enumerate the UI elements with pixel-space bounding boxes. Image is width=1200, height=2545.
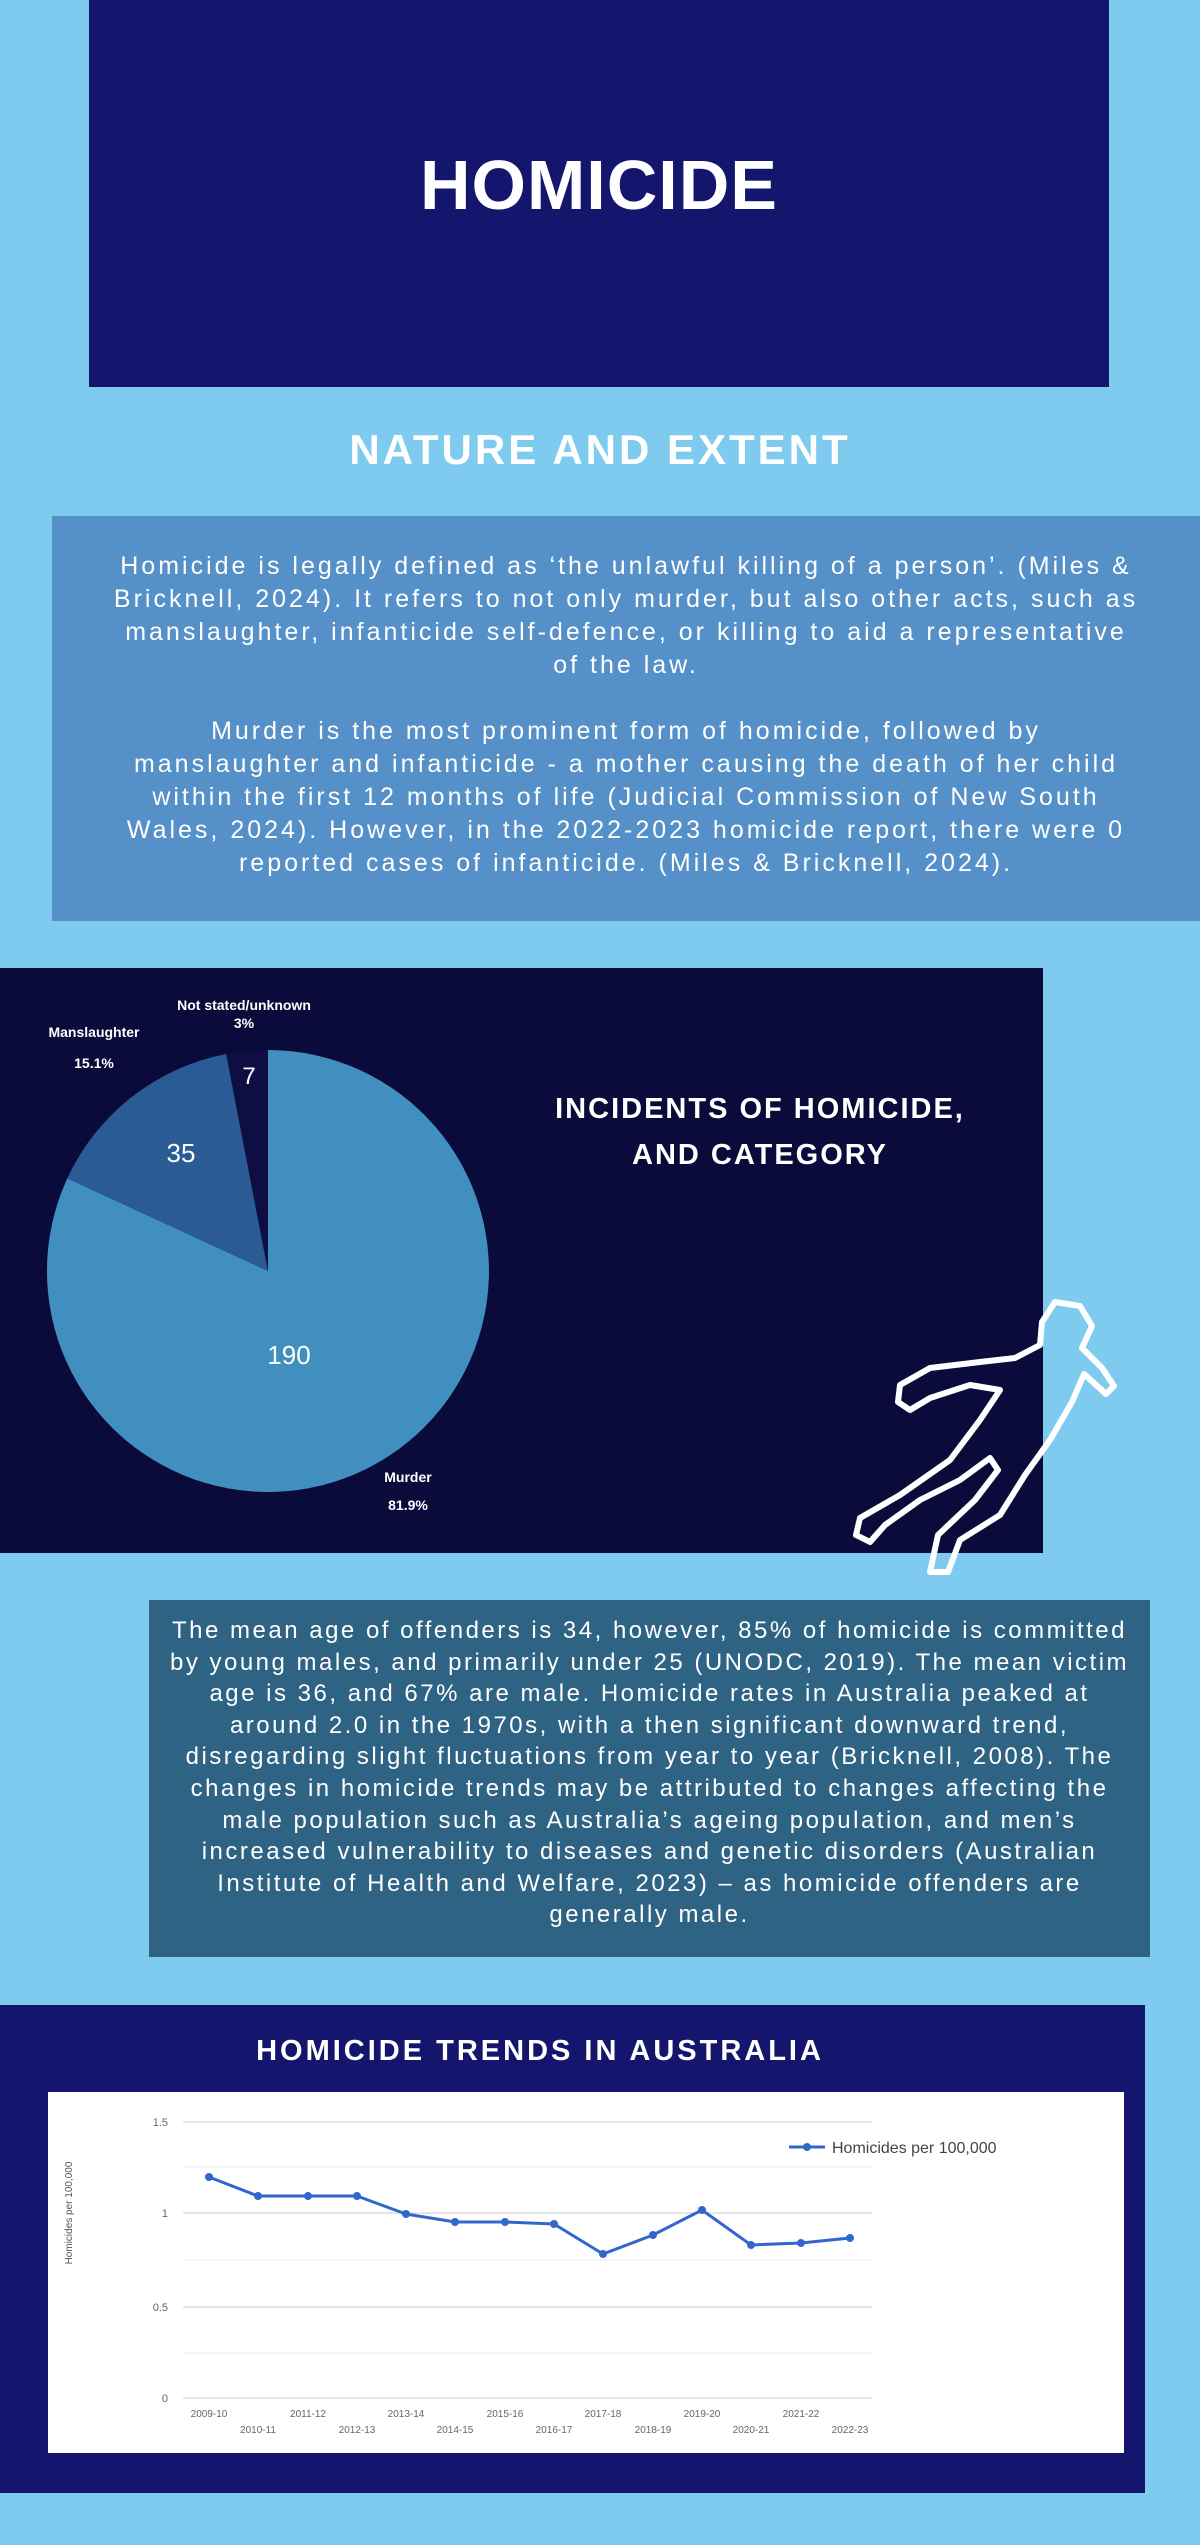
y axis labels: 0	[162, 2393, 168, 2405]
label: not stated: Not stated/unknown	[177, 997, 311, 1013]
label: not stated	[177, 997, 311, 1031]
slice: manslaughter	[67, 1054, 268, 1271]
y axis labels: 0.5	[153, 2302, 168, 2314]
x axis labels: 2016-17	[536, 2425, 573, 2436]
text block: offenders	[170, 1617, 1129, 1928]
text block: offenders: changes in homicide trends may be attributed to changes affecting the	[191, 1775, 1108, 1802]
heading: incidents of homicide: INCIDENTS OF HOMICIDE,	[555, 1093, 965, 1125]
x axis labels	[191, 2409, 869, 2436]
text block: offenders: generally male.	[549, 1901, 750, 1928]
text block: definition: manslaughter, infanticide self-defence, or killing to aid a representative	[125, 618, 1127, 646]
data line	[205, 2173, 854, 2258]
slice: murder	[47, 1050, 489, 1492]
slice: not stated	[226, 1050, 268, 1271]
x axis labels: 2014-15	[437, 2425, 474, 2436]
panel: offenders text box	[149, 1600, 1150, 1957]
x axis labels: 2022-23	[832, 2425, 869, 2436]
text block: offenders: The mean age of offenders is 34, however, 85% of homicide is committed	[172, 1617, 1127, 1644]
text block: offenders: around 2.0 in the 1970s, with a then significant downward trend,	[230, 1712, 1069, 1739]
text block: definition: reported cases of infanticide. (Miles & Bricknell, 2024).	[239, 849, 1013, 877]
text block: offenders: age is 36, and 67% are male. Homicide rates in Australia peaked at	[209, 1680, 1090, 1707]
y axis labels	[153, 2117, 168, 2405]
y axis labels: 1	[162, 2208, 168, 2220]
slice: not stated: 7	[242, 1063, 256, 1090]
title: HOMICIDE	[420, 146, 778, 224]
title banner	[89, 0, 1109, 387]
heading: incidents of homicide	[555, 1093, 965, 1171]
panel: definition text box	[52, 516, 1200, 921]
label: not stated: 3%	[234, 1015, 255, 1031]
panel: incidents of homicide	[0, 968, 1043, 1553]
label: manslaughter	[48, 1024, 140, 1071]
x axis labels: 2020-21	[733, 2425, 770, 2436]
label: murder: Murder	[384, 1469, 432, 1485]
text block: offenders: disregarding slight fluctuations from year to year (Bricknell, 2008). The	[186, 1743, 1113, 1770]
x axis labels: 2012-13	[339, 2425, 376, 2436]
label: manslaughter: Manslaughter	[48, 1024, 140, 1040]
slice: manslaughter: 35	[167, 1138, 195, 1168]
x axis labels: 2010-11	[240, 2425, 276, 2436]
text block: definition: Homicide is legally defined as ‘the unlawful killing of a person’. (Miles &	[120, 552, 1132, 580]
text block: definition: Bricknell, 2024). It refers to not only murder, but also other acts, such as	[114, 585, 1138, 613]
label: murder: 81.9%	[388, 1497, 428, 1513]
label: manslaughter: 15.1%	[74, 1055, 114, 1071]
label: murder	[384, 1469, 432, 1513]
text block: definition: manslaughter and infanticide - a mother causing the death of her child	[134, 750, 1118, 778]
heading: nature and extent: NATURE AND EXTENT	[349, 426, 851, 473]
y axis labels: 1.5	[153, 2117, 168, 2129]
text block: offenders: increased vulnerability to diseases and genetic disorders (Australian	[202, 1838, 1097, 1865]
text block: offenders: Institute of Health and Welfare, 2023) – as homicide offenders are	[217, 1870, 1082, 1897]
text block: definition: within the first 12 months of life (Judicial Commission of New South	[152, 783, 1100, 811]
x axis labels: 2018-19	[635, 2425, 672, 2436]
text block: offenders: male population such as Australia’s ageing population, and men’s	[222, 1807, 1077, 1834]
x axis labels: 2013-14	[388, 2409, 425, 2420]
text block: definition: Murder is the most prominent form of homicide, followed by	[211, 717, 1041, 745]
slice: murder: 190	[267, 1340, 311, 1370]
text block: definition: Wales, 2024). However, in the 2022-2023 homicide report, there were 0	[127, 816, 1125, 844]
text block: definition: of the law.	[553, 651, 699, 679]
x axis labels: 2015-16	[487, 2409, 524, 2420]
heading: incidents of homicide: AND CATEGORY	[632, 1139, 888, 1171]
panel: homicide trends	[0, 2005, 1145, 2493]
x axis labels: 2017-18	[585, 2409, 622, 2420]
icon: body outline	[852, 1299, 1118, 1575]
x axis labels: 2009-10	[191, 2409, 228, 2420]
text block: offenders: by young males, and primarily under 25 (UNODC, 2019). The mean victim	[170, 1649, 1129, 1676]
line chart	[48, 2092, 1124, 2453]
heading: homicide trends: HOMICIDE TRENDS IN AUSTRALIA	[256, 2035, 824, 2067]
pie chart	[46, 997, 489, 1513]
x axis labels: 2021-22	[783, 2409, 820, 2420]
text block: definition	[114, 552, 1138, 877]
legend: Homicides per 100,000	[832, 2140, 997, 2157]
y axis title: Homicides per 100,000	[64, 2161, 75, 2264]
x axis labels: 2019-20	[684, 2409, 721, 2420]
x axis labels: 2011-12	[290, 2409, 326, 2420]
